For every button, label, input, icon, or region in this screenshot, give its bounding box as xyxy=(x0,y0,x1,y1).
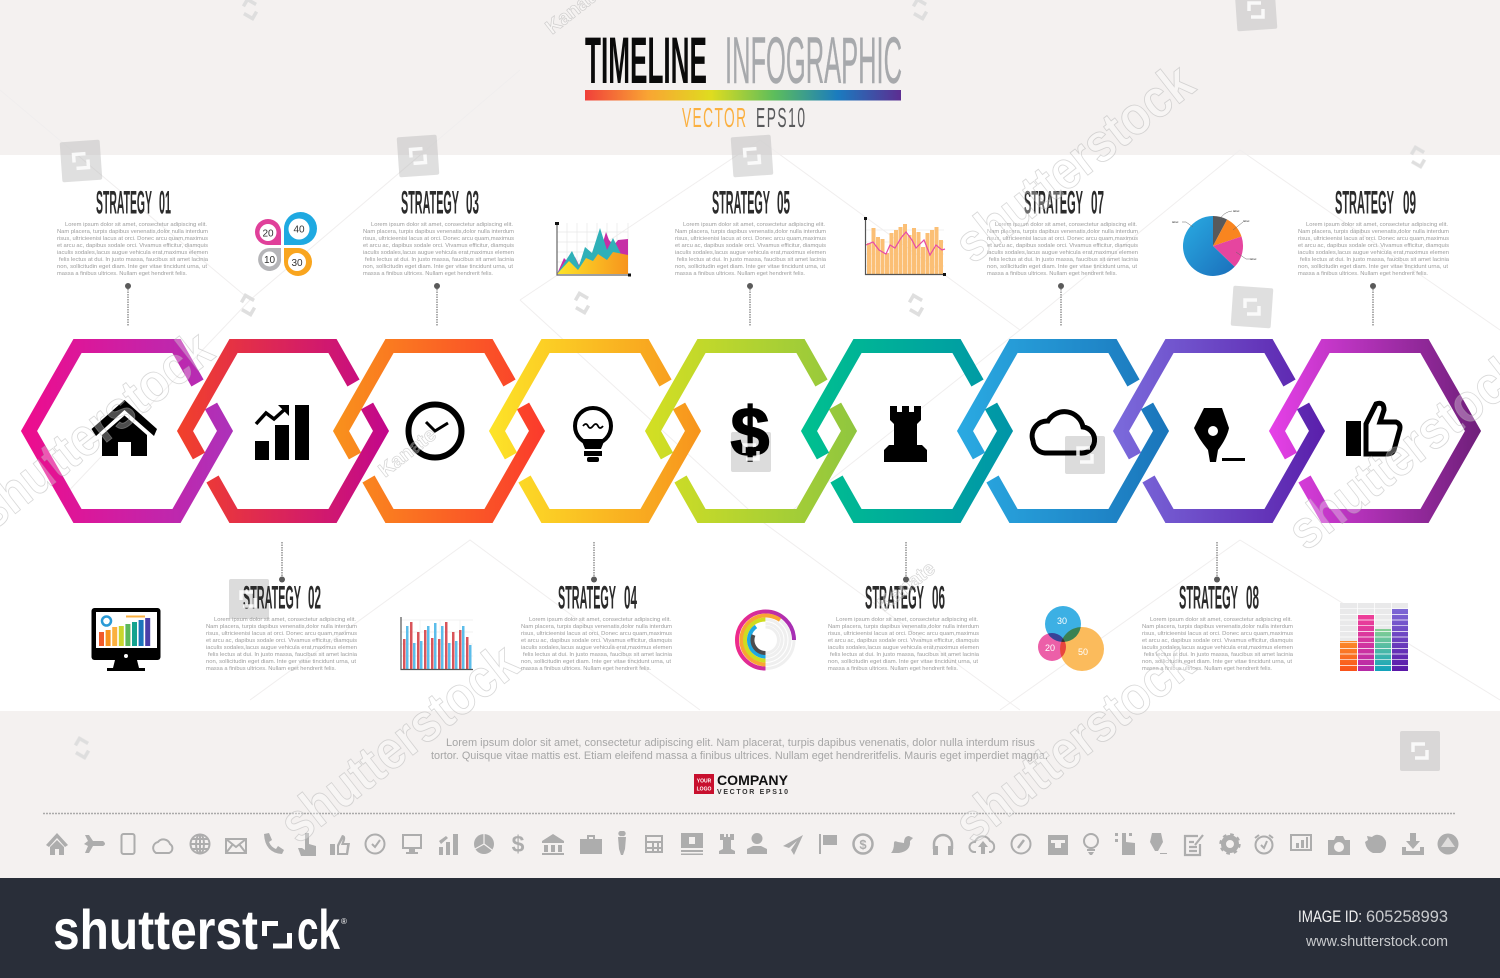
infographic canvas: STRATEGY xyxy=(243,580,301,616)
hexagon 5 xyxy=(653,346,849,516)
strategy 01 text: iaculis sodales,lacus augue vehicula erat,maximus elemen xyxy=(57,250,208,256)
small icon: presentation xyxy=(1291,835,1311,850)
small icon: clock xyxy=(366,834,384,854)
small icon: bulb xyxy=(1084,834,1098,855)
icon: home xyxy=(92,400,157,456)
small icon: coin xyxy=(854,834,872,854)
small icon: plane xyxy=(84,835,105,853)
hexagon 3 xyxy=(341,346,537,516)
strategy 09 text: risus, ultricieenisi lacus at orci. Donec arcu quam,maximus xyxy=(1298,236,1449,242)
small icon: bird xyxy=(891,836,913,853)
brand logo: shutterst xyxy=(53,898,258,961)
strategy 05 text: massa a finibus ultrices. Nullam eget hendrerit felis. xyxy=(675,271,805,277)
strategy 03 text: non, sollicitudin eget diam. Inte ger vitae tincidunt urna, ut xyxy=(363,264,513,270)
strategy 01 heading xyxy=(96,184,171,220)
website: www.shutterstock.com xyxy=(1305,933,1448,950)
top header band xyxy=(0,0,1500,155)
watermark: stamp marks xyxy=(74,3,1427,758)
connectors: lower pins xyxy=(279,542,1220,582)
chart: petal values: 40 xyxy=(293,224,305,236)
footer paragraph xyxy=(431,737,1048,762)
watermark: outline marks xyxy=(72,0,1428,758)
subtitle: EPS10 xyxy=(756,102,805,133)
infographic canvas: 08 xyxy=(1246,580,1259,616)
strategy 05 text: Nam placera, turpis dapibus venenatis,dolor nulla interdum xyxy=(675,229,826,235)
strategy 02 text: massa a finibus ultrices. Nullam eget hendrerit felis. xyxy=(206,666,336,672)
strategy 02 heading xyxy=(243,580,321,616)
chart: pie: label xyxy=(1243,219,1250,223)
infographic canvas: 03 xyxy=(466,184,479,220)
strategy 08 text xyxy=(1142,617,1294,672)
footer bar xyxy=(0,878,1500,978)
strategy 05 text xyxy=(675,222,827,277)
strategy 07 text: Lorem ipsum dolor sit amet, consectetur adipiscing elit. xyxy=(995,222,1137,228)
subtitle xyxy=(682,102,805,133)
chart: pie xyxy=(1172,209,1257,276)
infographic canvas: 04 xyxy=(624,580,637,616)
small icon: tap xyxy=(1115,833,1135,855)
strategy 06 text: risus, ultricieenisi lacus at orci. Donec arcu quam,maximus xyxy=(828,631,979,637)
infographic canvas: STRATEGY xyxy=(1179,580,1238,616)
company logo: COMPANY xyxy=(717,772,789,788)
small icon: download xyxy=(1402,833,1424,855)
icon: thumbs up xyxy=(1346,403,1400,456)
small icon: desktop xyxy=(402,834,422,854)
strategy 08 text: Lorem ipsum dolor sit amet, consectetur adipiscing elit. xyxy=(1150,617,1292,623)
chart: pie: label xyxy=(1233,209,1240,213)
strategy 07 text: risus, ultricieenisi lacus at orci. Donec arcu quam,maximus xyxy=(987,236,1138,242)
chart: equalizer blocks xyxy=(1340,603,1408,671)
strategy 08 heading xyxy=(1179,580,1259,616)
title: TIMELINE xyxy=(585,24,707,97)
chart: venn circles: 20 xyxy=(1045,643,1055,653)
small icon: small rook xyxy=(719,834,735,854)
strategy 06 text: massa a finibus ultrices. Nullam eget hendrerit felis. xyxy=(828,666,958,672)
icon: growth bars xyxy=(255,405,309,460)
small icon: cloud upload xyxy=(969,836,994,854)
strategy 06 text: Lorem ipsum dolor sit amet, consectetur adipiscing elit. xyxy=(836,617,978,623)
strategy 04 text: felis lectus at dui. In justo massa, faucibus sit amet lacinia xyxy=(523,652,673,658)
strategy 07 text: et arcu ac, dapibus sodale orci. Vivamus efficitur, diamquis xyxy=(987,243,1138,249)
small icon: banknote xyxy=(681,833,703,855)
strategy 06 text xyxy=(828,617,980,672)
icon: light bulb xyxy=(575,408,611,462)
strategy 06 text: iaculis sodales,lacus augue vehicula erat,maximus elemen xyxy=(828,645,979,651)
strategy 07 text: non, sollicitudin eget diam. Inte ger vitae tincidunt urna, ut xyxy=(987,264,1137,270)
strategy 07 text: Nam placera, turpis dapibus venenatis,dolor nulla interdum xyxy=(987,229,1138,235)
strategy 05 text: felis lectus at dui. In justo massa, faucibus sit amet lacinia xyxy=(677,257,827,263)
small icon: bars xyxy=(439,834,458,855)
small icon: pie xyxy=(474,834,494,854)
image id: 605258993 xyxy=(1366,907,1448,926)
small icon: note edit xyxy=(1185,835,1203,855)
watermark: shutterstock text: Kanate xyxy=(874,558,940,616)
small icon: dollar: $ xyxy=(512,831,525,857)
strategy 08 text: Nam placera, turpis dapibus venenatis,dolor nulla interdum xyxy=(1142,624,1293,630)
small icon: ball xyxy=(1438,834,1458,854)
small icon: handset xyxy=(264,833,284,854)
infographic canvas: 06 xyxy=(932,580,945,616)
small icon: coin: $ xyxy=(859,837,867,852)
infographic canvas: STRATEGY xyxy=(401,184,459,220)
strategy 04 text: et arcu ac, dapibus sodale orci. Vivamus efficitur, diamquis xyxy=(521,638,672,644)
watermark: shutterstock text: shutterstock xyxy=(943,51,1206,274)
small icon: home xyxy=(46,833,68,855)
strategy 09 text xyxy=(1298,222,1450,277)
infographic canvas: STRATEGY xyxy=(558,580,616,616)
strategy 02 text: risus, ultricieenisi lacus at orci. Donec arcu quam,maximus xyxy=(206,631,357,637)
watermark: shutterstock text: shutterstock xyxy=(268,631,531,854)
chart: pie: label xyxy=(1172,220,1179,224)
infographic canvas: INFOGRAPHIC xyxy=(725,24,902,97)
strategy 03 text: Lorem ipsum dolor sit amet, consectetur adipiscing elit. xyxy=(371,222,513,228)
strategy 04 heading xyxy=(558,580,637,616)
strategy 09 text: iaculis sodales,lacus augue vehicula erat,maximus elemen xyxy=(1298,250,1449,256)
strategy 03 text: Nam placera, turpis dapibus venenatis,dolor nulla interdum xyxy=(363,229,514,235)
company logo: LOGO xyxy=(697,786,711,792)
strategy 09 text: felis lectus at dui. In justo massa, faucibus sit amet lacinia xyxy=(1300,257,1450,263)
strategy 01 text: risus, ultricieenisi lacus at orci. Donec arcu quam,maximus xyxy=(57,236,208,242)
chart: petal values: 10 xyxy=(264,255,275,266)
strategy 02 text: et arcu ac, dapibus sodale orci. Vivamus efficitur, diamquis xyxy=(206,638,357,644)
strategy 06 text: Nam placera, turpis dapibus venenatis,dolor nulla interdum xyxy=(828,624,979,630)
strategy 08 text: et arcu ac, dapibus sodale orci. Vivamus efficitur, diamquis xyxy=(1142,638,1293,644)
small icon: thumb xyxy=(330,835,350,855)
strategy 03 text xyxy=(363,222,515,277)
strategy 04 text xyxy=(521,617,673,672)
chart: radial rings xyxy=(737,612,794,668)
small icon: calculator xyxy=(645,835,663,853)
strategy 03 text: iaculis sodales,lacus augue vehicula erat,maximus elemen xyxy=(363,250,514,256)
strategy 04 text: non, sollicitudin eget diam. Inte ger vitae tincidunt urna, ut xyxy=(521,659,671,665)
small icon: piggy bank xyxy=(1365,835,1386,853)
strategy 05 heading xyxy=(712,184,790,220)
strategy 09 text: massa a finibus ultrices. Nullam eget hendrerit felis. xyxy=(1298,271,1428,277)
infographic canvas: STRATEGY xyxy=(865,580,924,616)
small icon: person xyxy=(618,831,626,855)
small icon: user xyxy=(747,833,767,854)
infographic canvas: STRATEGY xyxy=(96,184,152,220)
strategy 06 text: felis lectus at dui. In justo massa, faucibus sit amet lacinia xyxy=(830,652,980,658)
strategy 04 text: risus, ultricieenisi lacus at orci. Donec arcu quam,maximus xyxy=(521,631,672,637)
footer paragraph: tortor. Quisque vitae mattis est. Etiam eleifend massa a finibus ultrices. Nullam eget hendreritfelis. Mauris eget imperdiet magna. xyxy=(431,750,1048,762)
strategy 05 text: Lorem ipsum dolor sit amet, consectetur adipiscing elit. xyxy=(683,222,825,228)
stamps behind content xyxy=(229,432,1105,619)
strategy 09 heading xyxy=(1335,184,1416,220)
icon: clock xyxy=(408,404,462,458)
strategy 01 text xyxy=(57,222,209,277)
icon: cloud xyxy=(1032,412,1095,453)
icon: rook xyxy=(884,406,927,462)
small icon: archive box xyxy=(1048,835,1068,855)
infographic canvas: STRATEGY xyxy=(1024,184,1083,220)
strategy 02 text xyxy=(206,617,358,672)
strategy 02 text: non, sollicitudin eget diam. Inte ger vitae tincidunt urna, ut xyxy=(206,659,356,665)
watermark: logo stamps xyxy=(60,0,1440,771)
hexagon 4 xyxy=(497,346,693,516)
strategy 01 text: Nam placera, turpis dapibus venenatis,dolor nulla interdum xyxy=(57,229,208,235)
strategy 01 text: et arcu ac, dapibus sodale orci. Vivamus efficitur, diamquis xyxy=(57,243,208,249)
strategy 01 text: non, sollicitudin eget diam. Inte ger vitae tincidunt urna, ut xyxy=(57,264,207,270)
infographic canvas: 07 xyxy=(1091,184,1104,220)
strategy 03 heading xyxy=(401,184,479,220)
small icon: bank xyxy=(542,834,564,855)
strategy 09 text: Lorem ipsum dolor sit amet, consectetur adipiscing elit. xyxy=(1306,222,1448,228)
strategy 03 text: et arcu ac, dapibus sodale orci. Vivamus efficitur, diamquis xyxy=(363,243,514,249)
infographic canvas: 02 xyxy=(308,580,321,616)
chart: bars and line xyxy=(864,217,946,276)
small icon: pen tool xyxy=(1150,833,1167,854)
strategy 08 text: iaculis sodales,lacus augue vehicula erat,maximus elemen xyxy=(1142,645,1293,651)
strategy 02 text: iaculis sodales,lacus augue vehicula erat,maximus elemen xyxy=(206,645,357,651)
strategy 06 text: et arcu ac, dapibus sodale orci. Vivamus efficitur, diamquis xyxy=(828,638,979,644)
hexagon 7 xyxy=(965,346,1161,516)
small icon: cloud xyxy=(153,839,172,853)
chart: pie: label xyxy=(1250,257,1257,261)
strategy 07 text: iaculis sodales,lacus augue vehicula erat,maximus elemen xyxy=(987,250,1138,256)
small icon: briefcase xyxy=(580,835,602,854)
strategy 07 text: massa a finibus ultrices. Nullam eget hendrerit felis. xyxy=(987,271,1117,277)
hexagon 2 xyxy=(185,346,381,516)
strategy 08 text: non, sollicitudin eget diam. Inte ger vitae tincidunt urna, ut xyxy=(1142,659,1292,665)
strategy 03 text: risus, ultricieenisi lacus at orci. Donec arcu quam,maximus xyxy=(363,236,514,242)
lower footer band xyxy=(0,711,1500,878)
small icon: gear xyxy=(1221,835,1239,853)
rainbow bar xyxy=(585,90,901,100)
chart: venn circles: 50 xyxy=(1078,647,1088,657)
strategy 09 text: et arcu ac, dapibus sodale orci. Vivamus efficitur, diamquis xyxy=(1298,243,1449,249)
strategy 05 text: non, sollicitudin eget diam. Inte ger vitae tincidunt urna, ut xyxy=(675,264,825,270)
icon row xyxy=(46,831,1458,857)
strategy 05 text: risus, ultricieenisi lacus at orci. Donec arcu quam,maximus xyxy=(675,236,826,242)
small icon: mobile xyxy=(122,834,134,854)
strategy 08 text: risus, ultricieenisi lacus at orci. Donec arcu quam,maximus xyxy=(1142,631,1293,637)
infographic canvas: 09 xyxy=(1403,184,1416,220)
brand logo: ck xyxy=(297,898,341,961)
chart: petal values: 30 xyxy=(291,258,303,269)
strategy 06 heading xyxy=(865,580,945,616)
infographic canvas: 05 xyxy=(777,184,790,220)
strategy 01 text: massa a finibus ultrices. Nullam eget hendrerit felis. xyxy=(57,271,187,277)
strategy 08 text: felis lectus at dui. In justo massa, faucibus sit amet lacinia xyxy=(1144,652,1294,658)
chart: venn circles: 30 xyxy=(1057,616,1067,626)
strategy 04 text: iaculis sodales,lacus augue vehicula erat,maximus elemen xyxy=(521,645,672,651)
infographic canvas: STRATEGY xyxy=(712,184,770,220)
hexagon 9 xyxy=(1277,346,1473,516)
small icon: earcups xyxy=(933,846,953,855)
connectors: upper pins xyxy=(125,283,1376,326)
strategy 02 text: felis lectus at dui. In justo massa, faucibus sit amet lacinia xyxy=(208,652,358,658)
infographic canvas: 01 xyxy=(159,184,171,220)
strategy 07 text: felis lectus at dui. In justo massa, faucibus sit amet lacinia xyxy=(989,257,1139,263)
small icon: envelope xyxy=(226,839,246,853)
hexagon 6 xyxy=(809,346,1005,516)
icon: dollar: $ xyxy=(731,393,769,471)
hexagon 8 xyxy=(1121,346,1317,516)
image id xyxy=(1298,907,1448,926)
company logo: YOUR xyxy=(697,778,712,784)
chart: petal values: 20 xyxy=(262,228,274,240)
strategy 09 text: Nam placera, turpis dapibus venenatis,dolor nulla interdum xyxy=(1298,229,1449,235)
strategy 08 text: massa a finibus ultrices. Nullam eget hendrerit felis. xyxy=(1142,666,1272,672)
strategy 01 text: felis lectus at dui. In justo massa, faucibus sit amet lacinia xyxy=(59,257,209,263)
strategy 03 text: massa a finibus ultrices. Nullam eget hendrerit felis. xyxy=(363,271,493,277)
strategy 02 text: Nam placera, turpis dapibus venenatis,dolor nulla interdum xyxy=(206,624,357,630)
strategy 05 text: et arcu ac, dapibus sodale orci. Vivamus efficitur, diamquis xyxy=(675,243,826,249)
small icon: alarm clock xyxy=(1255,835,1273,854)
image id: IMAGE ID: xyxy=(1298,907,1362,926)
strategy 03 text: felis lectus at dui. In justo massa, faucibus sit amet lacinia xyxy=(365,257,515,263)
chart: red and blue bars xyxy=(401,617,473,670)
small icon: flag xyxy=(819,834,837,854)
footer paragraph: Lorem ipsum dolor sit amet, consectetur adipiscing elit. Nam placerat, turpis dapibus venenatis, dolor nulla interdum risus xyxy=(446,737,1035,749)
strategy 02 text: Lorem ipsum dolor sit amet, consectetur adipiscing elit. xyxy=(214,617,356,623)
chart: venn circles xyxy=(1038,606,1104,671)
strategy 04 text: Nam placera, turpis dapibus venenatis,dolor nulla interdum xyxy=(521,624,672,630)
brand logo: ® xyxy=(341,917,347,926)
small icon: camera xyxy=(1328,836,1350,855)
company logo: VECTOR EPS10 xyxy=(717,789,788,796)
company logo xyxy=(694,772,789,796)
strategy 07 heading xyxy=(1024,184,1104,220)
icon: monitor dashboard xyxy=(92,608,160,671)
watermark: shutterstock text: shutterstock xyxy=(943,631,1206,854)
hexagon 1 xyxy=(29,346,225,516)
watermark: shutterstock text: Kanate xyxy=(375,424,441,482)
watermark lines xyxy=(0,70,1500,710)
chart: area xyxy=(555,222,631,276)
strategy 07 text xyxy=(987,222,1139,277)
strategy 09 text: non, sollicitudin eget diam. Inte ger vitae tincidunt urna, ut xyxy=(1298,264,1448,270)
strategy 05 text: iaculis sodales,lacus augue vehicula erat,maximus elemen xyxy=(675,250,826,256)
small icon: globe xyxy=(190,834,210,854)
strategy 04 text: massa a finibus ultrices. Nullam eget hendrerit felis. xyxy=(521,666,651,672)
small icon: headphones xyxy=(934,835,952,849)
icon: pen nib xyxy=(1194,408,1245,462)
chart: petal values xyxy=(255,212,317,276)
small icon: compass xyxy=(1012,834,1030,854)
small icon: paper plane xyxy=(783,835,803,855)
strategy 06 text: non, sollicitudin eget diam. Inte ger vitae tincidunt urna, ut xyxy=(828,659,978,665)
small icon: touch xyxy=(298,833,316,856)
strategy 01 text: Lorem ipsum dolor sit amet, consectetur adipiscing elit. xyxy=(65,222,207,228)
subtitle: VECTOR xyxy=(682,102,746,133)
strategy 04 text: Lorem ipsum dolor sit amet, consectetur adipiscing elit. xyxy=(529,617,671,623)
